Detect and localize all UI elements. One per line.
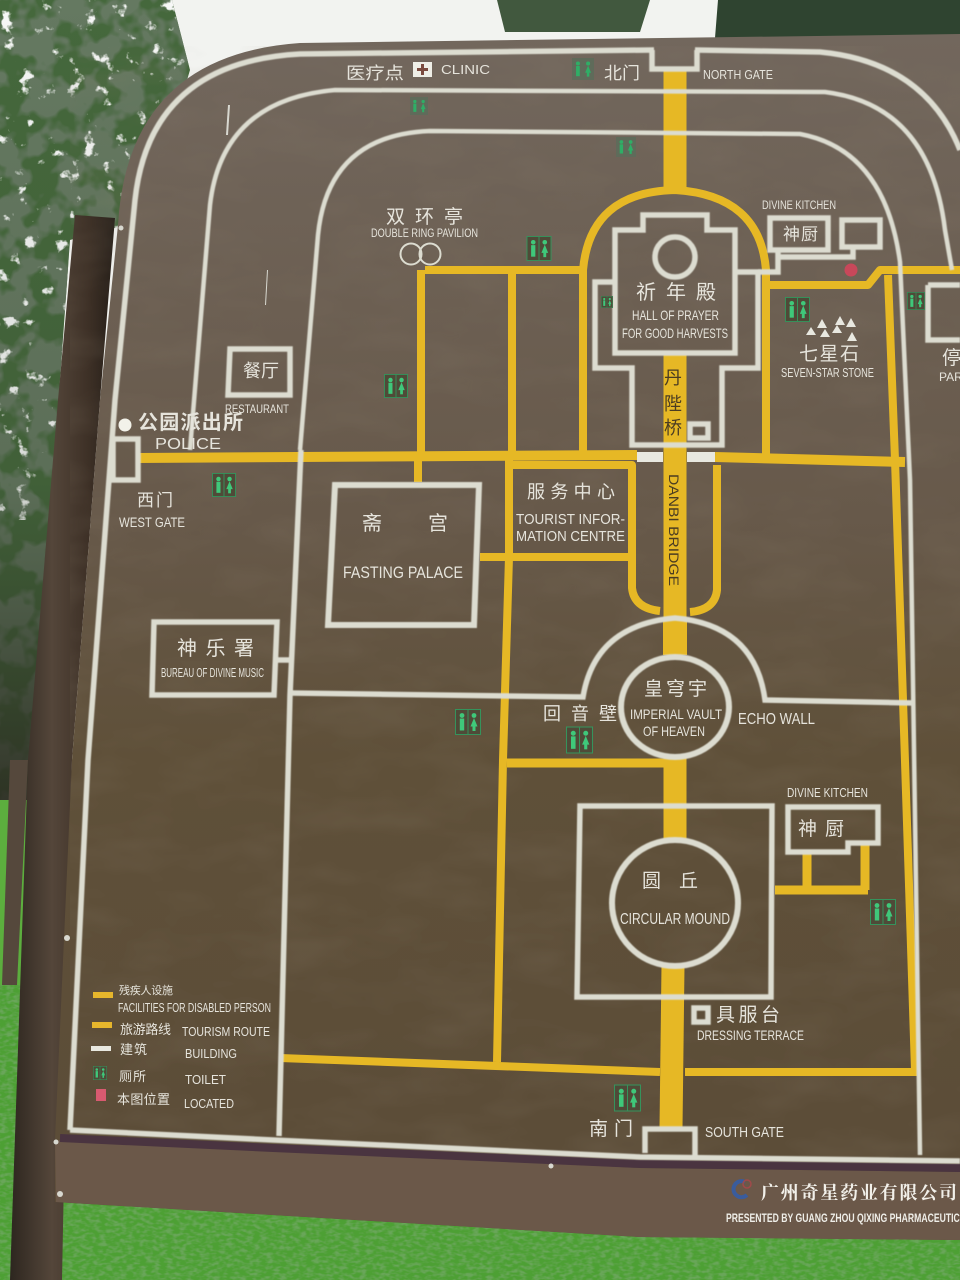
labels: west side: 餐厅 [243,361,279,381]
labels: circular mound: CIRCULAR MOUND [620,911,730,928]
labels: west side: RESTAURANT [225,402,290,416]
labels: imperial vault: 皇穹宇 [644,678,707,700]
labels: west side: WEST GATE [119,514,185,530]
labels: circular mound: 圆丘 [642,870,698,892]
labels: west side: POLICE [155,436,221,453]
labels: fasting palace: 宫 [428,512,448,535]
sponsor text: 广州奇星药业有限公司 [761,1183,957,1203]
scratches and bolts [54,105,554,1197]
background trees [0,0,960,800]
labels: west side [119,361,290,680]
labels: imperial vault [543,678,815,739]
legend: 建筑 [120,1042,147,1057]
sponsor logo [733,1180,751,1197]
labels: west side: 公园派出所 [138,411,243,434]
labels: hall of prayer: FOR GOOD HARVESTS [622,325,728,341]
icon: seven stars [806,316,857,341]
labels: tourist centre: MATION CENTRE [516,528,625,545]
sponsor text [726,1183,960,1225]
bottom strip line [60,1138,960,1168]
labels: south area [589,1004,804,1141]
tree trunk and grass [0,760,960,1280]
labels: north area: 双环亭 [386,206,463,228]
icon: clinic cross [413,62,432,77]
legend: 残疾人设施 [119,983,173,997]
labels: danbi bridge: DANBI BRIDGE [666,474,682,586]
legend: BUILDING [185,1046,237,1061]
central axis road [671,70,675,1128]
sign post [10,215,115,1280]
labels: north area: NORTH GATE [703,68,773,82]
legend: 旅游路线 [120,1022,171,1037]
labels: circular mound: DIVINE KITCHEN [787,785,868,800]
labels: west side: BUREAU OF DIVINE MUSIC [161,665,264,680]
bottom strip [55,1140,960,1240]
labels: seven-star stone: SEVEN-STAR STONE [781,365,874,380]
labels: west side: 西门 [137,491,173,510]
labels: north area: DOUBLE RING PAVILION [371,228,478,240]
tourism routes [137,190,960,1072]
labels: danbi bridge: 丹 [664,368,682,388]
labels: south area: 具服台 [716,1004,780,1026]
labels: seven-star stone: 七星石 [799,343,859,365]
legend: FACILITIES FOR DISABLED PERSON [118,1001,271,1015]
icon: located marker [844,264,858,276]
labels: south area: DRESSING TERRACE [697,1028,804,1043]
labels: south area: 南门 [589,1118,633,1140]
labels: fasting palace: FASTING PALACE [343,563,463,582]
labels: hall of prayer: 神厨 [783,225,818,244]
labels: hall of prayer: 祈年殿 [636,281,716,304]
white bridge crossing [637,452,715,462]
labels: seven-star stone [781,343,960,384]
labels: north area: CLINIC [441,62,490,77]
legend [91,983,271,1111]
toilet icons [212,58,925,1111]
icon: police dot [118,418,132,432]
legend: 本图位置 [117,1092,170,1107]
labels: circular mound [620,785,868,928]
labels: north area: 北门 [604,64,640,83]
legend: 厕所 [119,1069,146,1084]
labels: imperial vault: IMPERIAL VAULT [630,707,722,722]
legend: LOCATED [184,1096,234,1111]
labels: tourist centre: TOURIST INFOR- [516,511,625,528]
labels: fasting palace: 斋 [362,512,382,535]
labels: north area: 医疗点 [346,64,404,83]
labels: danbi bridge [664,368,682,586]
legend: TOILET [185,1072,226,1087]
labels: imperial vault: 回音壁 [543,704,617,724]
labels: west side: 神乐署 [177,637,254,660]
labels: imperial vault: OF HEAVEN [643,723,705,739]
labels: north area [346,62,773,240]
labels: hall of prayer [622,200,836,341]
labels: hall of prayer: HALL OF PRAYER [632,307,719,323]
labels: circular mound: 神厨 [798,818,844,840]
legend: TOURISM ROUTE [182,1024,270,1039]
labels: hall of prayer: DIVINE KITCHEN [762,200,836,212]
labels: tourist centre [516,482,625,545]
labels: danbi bridge: 陛 [664,394,682,414]
labels: south area: SOUTH GATE [705,1124,784,1141]
labels: fasting palace [343,512,463,582]
icon: double rings [400,244,440,264]
labels: tourist centre: 服务中心 [527,482,615,502]
labels: danbi bridge: 桥 [664,418,682,438]
labels: imperial vault: ECHO WALL [738,711,815,728]
